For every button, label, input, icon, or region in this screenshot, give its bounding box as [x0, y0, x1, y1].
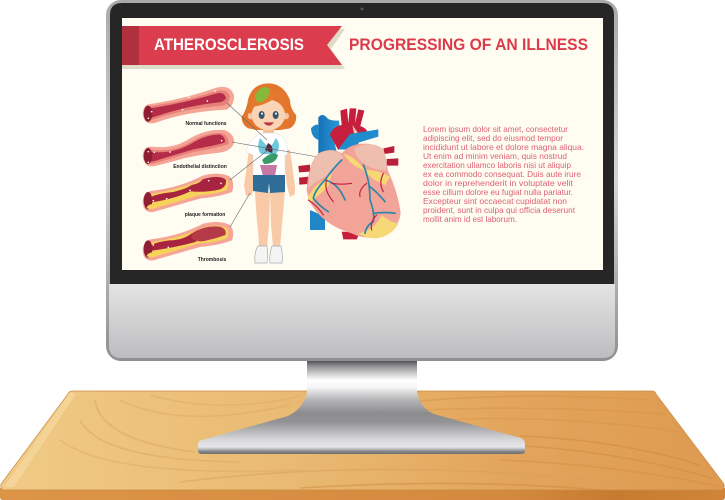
artery: endothelial	[143, 130, 234, 166]
monitor frame	[106, 0, 618, 361]
vena cava	[318, 115, 340, 158]
body text: esse cillum dolore eu fugiat nulla pariatur.	[423, 188, 573, 197]
label: thrombosis: Thrombosis	[198, 257, 227, 263]
coronary arteries	[313, 160, 395, 233]
subtitle: PROGRESSING OF AN ILLNESS	[349, 35, 588, 54]
heart body	[307, 144, 401, 238]
desk	[0, 391, 725, 500]
monitor stand	[198, 361, 525, 454]
artery: plaque	[143, 174, 233, 212]
banner	[122, 26, 345, 69]
mouth	[263, 122, 274, 126]
body text: dolor in reprehenderit in voluptate velit	[423, 179, 574, 188]
body text: Ut enim ad minim veniam, quis nostrud	[423, 152, 567, 161]
green patch	[255, 87, 270, 102]
heart	[298, 108, 401, 239]
artery: thrombosis	[143, 222, 233, 260]
neck	[263, 126, 274, 137]
aorta branches	[330, 108, 367, 150]
leader lines	[227, 103, 318, 227]
banner title: ATHEROSCLEROSIS	[154, 35, 304, 54]
body text: incididunt ut labore et dolore magna aliqua.	[423, 143, 584, 152]
body text: proident, sunt in culpa qui officia deserunt	[423, 206, 576, 215]
shirt	[246, 133, 287, 176]
legs	[255, 190, 285, 247]
organs	[258, 138, 279, 154]
screen	[122, 18, 603, 270]
body text: Lorem ipsum dolor sit amet, consectetur	[423, 125, 568, 134]
side vessels	[298, 146, 398, 185]
monitor chin	[109, 284, 615, 358]
label: normal functions: Normal functions	[185, 121, 227, 127]
shorts	[253, 175, 285, 193]
atria	[308, 144, 386, 188]
pulmonary	[338, 129, 378, 150]
inferior vessels	[310, 210, 325, 230]
label: plaque: plaque formation	[185, 212, 225, 218]
body text: exercitation ullamco laboris nisi ut aliquip	[423, 161, 571, 170]
face	[248, 113, 254, 119]
camera	[360, 8, 364, 10]
body text	[423, 125, 584, 224]
hair back	[242, 83, 296, 130]
stand foot base	[198, 447, 525, 454]
body text: adipiscing elit, sed do eiusmod tempor	[423, 134, 563, 143]
monitor	[106, 0, 618, 361]
body text: Excepteur sint occaecat cupidatat non	[423, 197, 567, 206]
fat deposits	[308, 153, 398, 238]
body text: mollit anim id est laborum.	[423, 215, 517, 224]
artery: normal	[143, 87, 234, 123]
hair fringe	[250, 88, 286, 115]
shoes	[255, 246, 282, 263]
monitor bezel	[110, 3, 614, 284]
label: endothelial: Endothelial distinction	[173, 164, 227, 170]
wood grain	[60, 395, 718, 490]
body text: ex ea commodo consequat. Duis aute irure	[423, 170, 581, 179]
eyes	[259, 111, 265, 119]
arms	[244, 150, 295, 197]
wood sheen	[4, 392, 76, 487]
girl	[242, 83, 296, 263]
